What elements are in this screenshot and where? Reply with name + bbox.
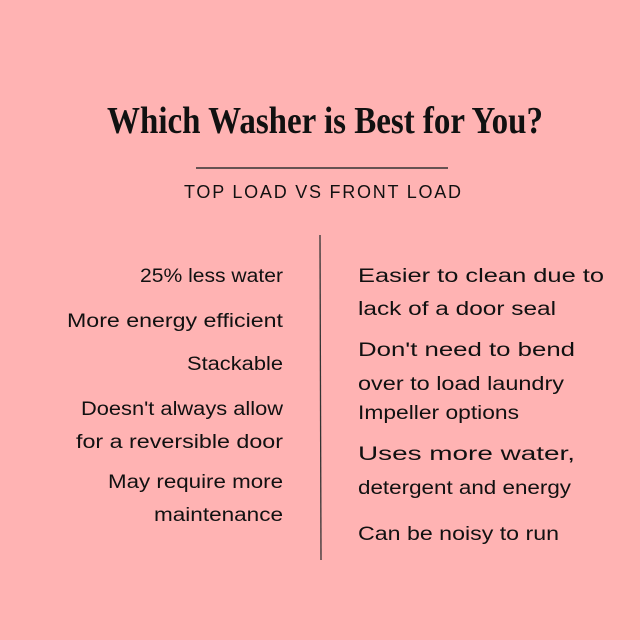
right column: front load: over to load laundry (358, 374, 565, 395)
right column: front load: lack of a door seal (358, 299, 556, 320)
right column: front load: Easier to clean due to (358, 266, 604, 287)
left column: top load: 25% less water (140, 266, 284, 287)
subtitle: TOP LOAD VS FRONT LOAD (184, 182, 461, 202)
right column: front load: Don't need to bend (358, 340, 575, 361)
left column: top load: May require more (108, 472, 283, 493)
left column: top load: Doesn't always allow (81, 399, 283, 420)
title: Which Washer is Best for You? (107, 100, 543, 142)
left column: top load: More energy efficient (67, 311, 284, 332)
right column: front load (358, 266, 604, 545)
right column: front load: Uses more water, (358, 444, 575, 465)
right column: front load: Impeller options (358, 403, 519, 424)
left column: top load: maintenance (154, 505, 283, 526)
right column: front load: detergent and energy (358, 478, 572, 499)
left column: top load (67, 266, 284, 526)
left column: top load: for a reversible door (76, 432, 284, 453)
left column: top load: Stackable (187, 354, 283, 375)
right column: front load: Can be noisy to run (358, 524, 559, 545)
